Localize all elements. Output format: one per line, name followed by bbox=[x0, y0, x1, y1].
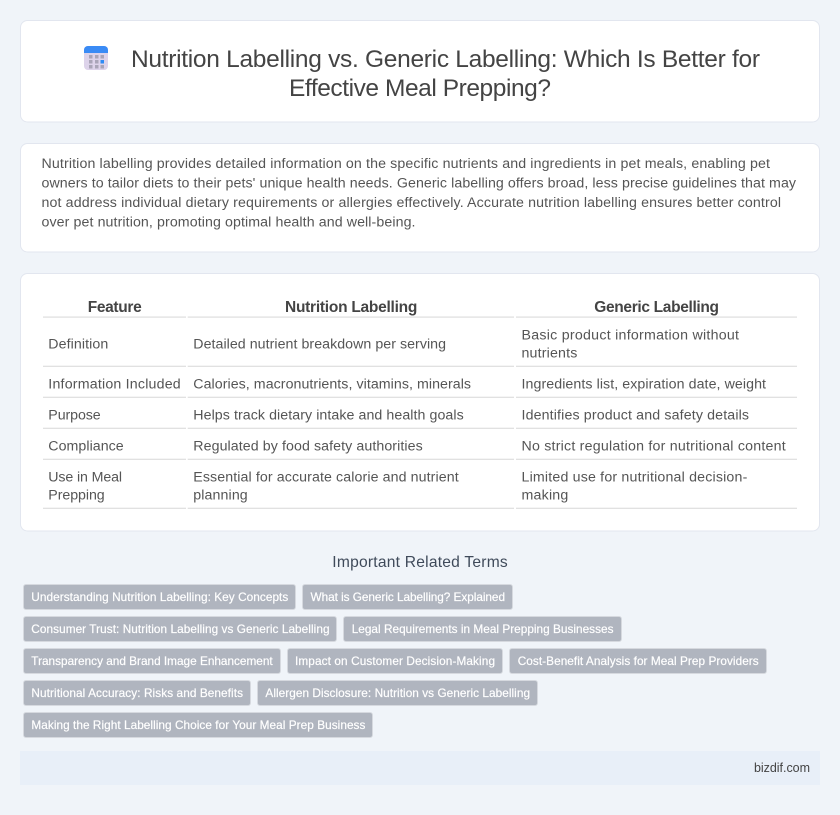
table row: purpose: Identifies product and safety details bbox=[522, 407, 749, 423]
panel: comparison table bbox=[20, 274, 820, 531]
table row: definition: Basic product information without bbox=[522, 327, 739, 343]
tag bbox=[302, 584, 512, 610]
tag bbox=[24, 680, 250, 706]
icon: calendar bbox=[84, 46, 108, 70]
tag: What is Generic Labelling? Explained bbox=[310, 590, 505, 604]
tag bbox=[258, 680, 538, 706]
heading: important related terms: Important Related Terms bbox=[332, 554, 508, 571]
panel: introduction bbox=[20, 144, 820, 252]
table row: compliance bbox=[43, 438, 797, 460]
table row: compliance: Compliance bbox=[48, 438, 124, 454]
tag: Transparency and Brand Image Enhancement bbox=[31, 654, 273, 668]
tag: Understanding Nutrition Labelling: Key Concepts bbox=[31, 590, 288, 604]
table row: compliance: No strict regulation for nutritional content bbox=[522, 438, 786, 454]
tag: Nutritional Accuracy: Risks and Benefits bbox=[31, 686, 243, 700]
tag bbox=[510, 648, 766, 674]
table row: use in meal prepping: Prepping bbox=[48, 487, 105, 503]
text block: introduction paragraph: over pet nutrition, promoting optimal health and well-being. bbox=[42, 214, 416, 230]
tag: Making the Right Labelling Choice for Your Meal Prep Business bbox=[31, 718, 365, 732]
table row: use in meal prepping: planning bbox=[193, 487, 248, 503]
tag: Allergen Disclosure: Nutrition vs Generic Labelling bbox=[265, 686, 530, 700]
table row: definition: nutrients bbox=[522, 345, 577, 361]
table row: definition: Definition bbox=[48, 336, 108, 352]
tag bbox=[24, 648, 280, 674]
table row: definition: Detailed nutrient breakdown per serving bbox=[193, 336, 446, 352]
tag bbox=[288, 648, 502, 674]
tag: Impact on Customer Decision-Making bbox=[295, 654, 495, 668]
text block: introduction paragraph: owners to tailor diets to their pets' unique health needs. Generic labelling offers broad, less precise guidelines that may bbox=[42, 176, 797, 192]
footer text: site name: bizdif.com bbox=[754, 761, 810, 775]
tag: Consumer Trust: Nutrition Labelling vs Generic Labelling bbox=[31, 622, 330, 636]
table header row: Feature bbox=[88, 299, 142, 316]
panel: title header bbox=[20, 20, 820, 122]
table row: information included bbox=[43, 376, 797, 398]
title: Effective Meal Prepping? bbox=[289, 75, 551, 102]
table header row: Generic Labelling bbox=[594, 299, 719, 316]
text block: introduction paragraph: not address individual dietary requirements or allergies effectively. Accurate nutrition labelling ensures better control bbox=[42, 195, 781, 211]
table row: information included: Information Included bbox=[48, 376, 181, 392]
text block: introduction paragraph: Nutrition labelling provides detailed information on the specific nutrients and ingredients in pet meals, enabling pet bbox=[42, 156, 770, 172]
table row: information included: Calories, macronutrients, vitamins, minerals bbox=[193, 376, 471, 392]
table header row: Nutrition Labelling bbox=[285, 299, 417, 316]
table row: definition bbox=[43, 327, 797, 367]
table header row bbox=[43, 299, 797, 318]
table row: use in meal prepping: Essential for accurate calorie and nutrient bbox=[193, 469, 459, 485]
table row: use in meal prepping: making bbox=[522, 487, 568, 503]
table row: use in meal prepping bbox=[43, 469, 797, 509]
tag: Cost-Benefit Analysis for Meal Prep Providers bbox=[518, 654, 759, 668]
tag bbox=[24, 712, 372, 738]
tag bbox=[24, 584, 296, 610]
table row: purpose bbox=[43, 407, 797, 429]
footer bar bbox=[20, 751, 820, 785]
table row: use in meal prepping: Limited use for nutritional decision- bbox=[522, 469, 748, 485]
table row: use in meal prepping: Use in Meal bbox=[48, 469, 122, 485]
table row: purpose: Helps track dietary intake and health goals bbox=[193, 407, 464, 423]
table row: compliance: Regulated by food safety authorities bbox=[193, 438, 423, 454]
table row: purpose: Purpose bbox=[48, 407, 101, 423]
tag: Legal Requirements in Meal Prepping Businesses bbox=[352, 622, 614, 636]
text block: introduction paragraph bbox=[42, 156, 797, 230]
tag bbox=[24, 616, 336, 642]
title: Nutrition Labelling vs. Generic Labelling: Which Is Better for bbox=[131, 46, 760, 73]
tag list: related terms bbox=[24, 584, 766, 738]
title bbox=[131, 46, 760, 102]
tag bbox=[344, 616, 622, 642]
table row: information included: Ingredients list, expiration date, weight bbox=[522, 376, 766, 392]
